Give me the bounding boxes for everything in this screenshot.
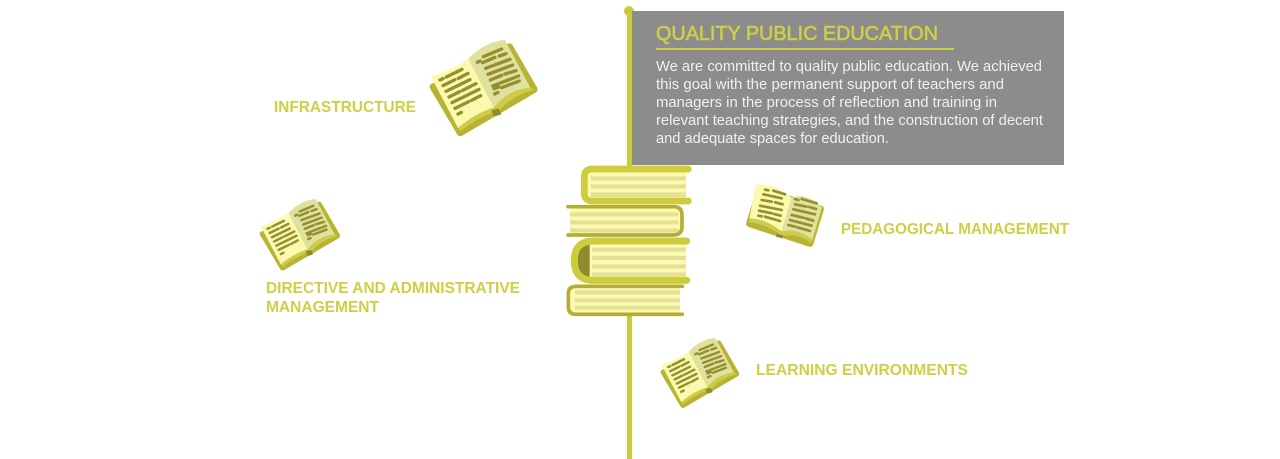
book 4: [568, 286, 682, 314]
icon: open book pedagogical: [746, 185, 824, 247]
book 3: [574, 241, 687, 280]
panel: quality public education: [632, 11, 1064, 165]
timeline vertical line: [624, 6, 634, 459]
label: directive and administrative management: MANAGEMENT: [266, 299, 379, 316]
label: pedagogical management: PEDAGOGICAL MANAGEMENT: [841, 221, 1069, 238]
icon: open book infrastructure: [430, 40, 538, 136]
label: infrastructure: INFRASTRUCTURE: [274, 99, 416, 116]
icon: stack of books: [568, 169, 688, 314]
label: learning environments: LEARNING ENVIRONMENTS: [756, 362, 968, 379]
body text: We are committed to quality public education. We achieved: [656, 59, 1042, 75]
label: directive and administrative management: DIRECTIVE AND ADMINISTRATIVE: [266, 280, 520, 297]
body text: managers in the process of reflection and training in: [656, 95, 997, 111]
body text: this goal with the permanent support of teachers and: [656, 77, 1004, 93]
label: directive and administrative management: [266, 280, 520, 316]
book 1: [584, 169, 688, 201]
body text: relevant teaching strategies, and the construction of decent: [656, 113, 1043, 129]
icon: open book directive: [260, 199, 340, 271]
body text: [656, 59, 1043, 147]
book 2: [568, 207, 682, 235]
icon: open book learning: [661, 338, 739, 408]
heading: QUALITY PUBLIC EDUCATION: [656, 22, 938, 45]
body text: and adequate spaces for education.: [656, 131, 889, 147]
